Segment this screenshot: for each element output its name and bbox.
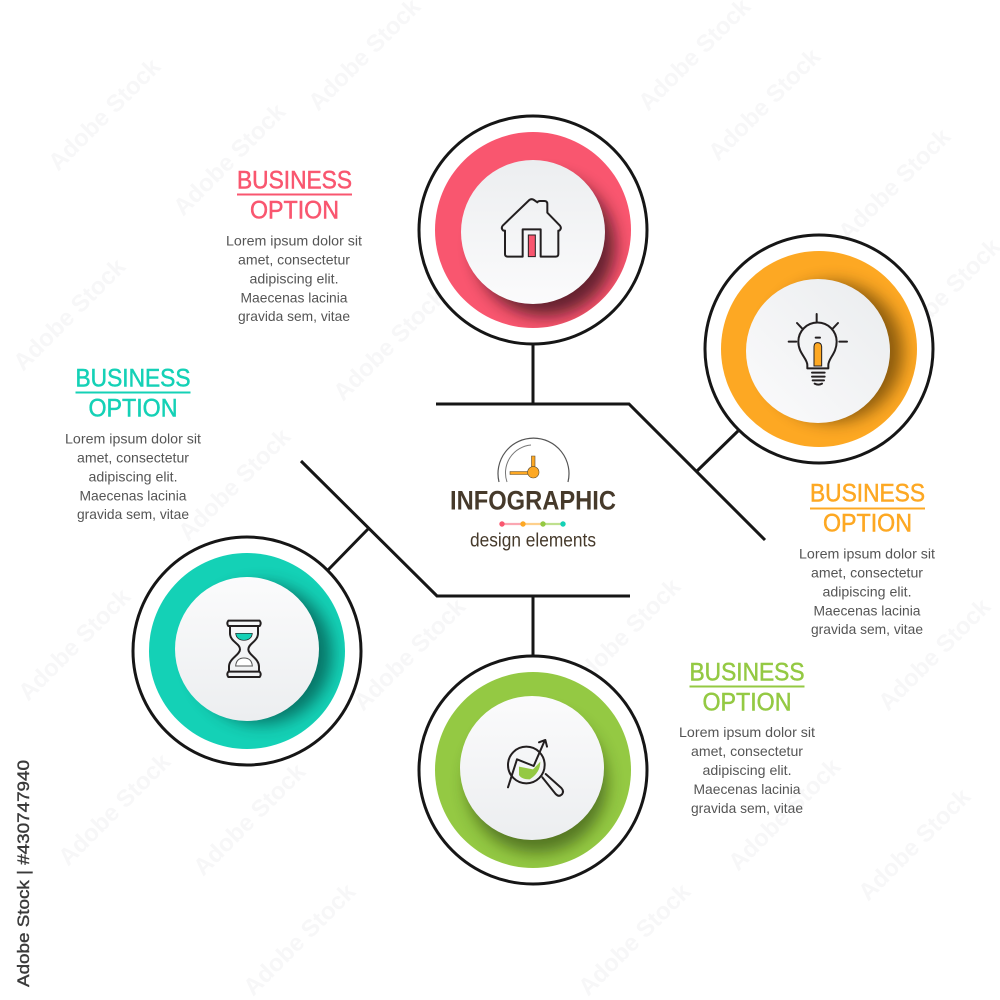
text: Adobe Stock (573, 878, 697, 1000)
text block: teal option: amet, consectetur (77, 450, 189, 466)
text: Adobe Stock (703, 43, 827, 166)
text block: teal option: BUSINESS (76, 364, 190, 392)
text: Adobe Stock (238, 878, 362, 1000)
circle: bottom green (419, 656, 647, 884)
text block: orange option: Lorem ipsum dolor sit (799, 546, 935, 562)
text block: green option: amet, consectetur (691, 743, 803, 759)
text block: red option: Lorem ipsum dolor sit (226, 232, 362, 248)
text block: red option: OPTION (250, 196, 339, 224)
center logo: design elements (470, 530, 596, 552)
text: Adobe Stock (8, 253, 132, 376)
text block: green option: OPTION (702, 688, 792, 716)
text block: orange option: OPTION (823, 510, 912, 538)
text block: red option: Maecenas lacinia (240, 290, 348, 306)
text block: red option: adipiscing elit. (250, 270, 338, 286)
text block: green option: BUSINESS (690, 658, 804, 686)
text: Adobe Stock (563, 573, 687, 696)
text block: orange option: BUSINESS (810, 480, 925, 508)
text block: teal option: OPTION (88, 394, 178, 422)
text: Adobe Stock (13, 583, 137, 706)
text: Adobe Stock (328, 283, 452, 406)
text: Adobe Stock (873, 593, 997, 716)
icon: house (502, 199, 561, 257)
icon: clock (498, 438, 569, 482)
text: Adobe Stock (53, 748, 177, 871)
dots timeline (499, 521, 566, 527)
text block: orange option: Maecenas lacinia (814, 602, 921, 618)
circle: top red (419, 116, 647, 344)
connector lines (301, 344, 765, 656)
text block: green option: Maecenas lacinia (694, 781, 801, 797)
center logo: INFOGRAPHIC (450, 486, 616, 516)
text block: green option (679, 658, 815, 816)
icon: magnifier chart (508, 740, 563, 796)
text block: green option: Lorem ipsum dolor sit (679, 724, 815, 740)
text block: red option: amet, consectetur (238, 252, 350, 268)
text block: teal option: gravida sem, vitae (77, 506, 189, 522)
text: Adobe Stock (43, 53, 167, 176)
text: Adobe Stock (188, 758, 312, 881)
text block: teal option (65, 364, 201, 522)
text block: orange option: amet, consectetur (811, 564, 923, 580)
text: Adobe Stock (168, 98, 292, 221)
text: Adobe Stock (173, 423, 297, 546)
icon: light bulb (789, 314, 847, 385)
text block: green option: adipiscing elit. (702, 762, 792, 778)
text block: orange option (799, 480, 935, 637)
text block: red option: BUSINESS (237, 166, 352, 194)
icon: hourglass (227, 621, 261, 677)
circle: left teal (133, 537, 361, 765)
text block: teal option: Lorem ipsum dolor sit (65, 430, 201, 446)
text block: red option (226, 166, 362, 324)
text block: teal option: Maecenas lacinia (80, 488, 187, 504)
circle: right orange (705, 235, 933, 463)
text block: red option: gravida sem, vitae (238, 308, 350, 324)
stock id label: Adobe Stock | #430747940 (14, 760, 33, 987)
text: Adobe Stock (723, 753, 847, 876)
text block: green option: gravida sem, vitae (691, 800, 803, 816)
text: Adobe Stock (833, 123, 957, 246)
text block: teal option: adipiscing elit. (88, 468, 178, 484)
text block: orange option: adipiscing elit. (822, 584, 912, 600)
text: Adobe Stock (348, 593, 472, 716)
text block: orange option: gravida sem, vitae (811, 621, 923, 637)
center logo (450, 438, 616, 552)
text: Adobe Stock (853, 783, 977, 906)
